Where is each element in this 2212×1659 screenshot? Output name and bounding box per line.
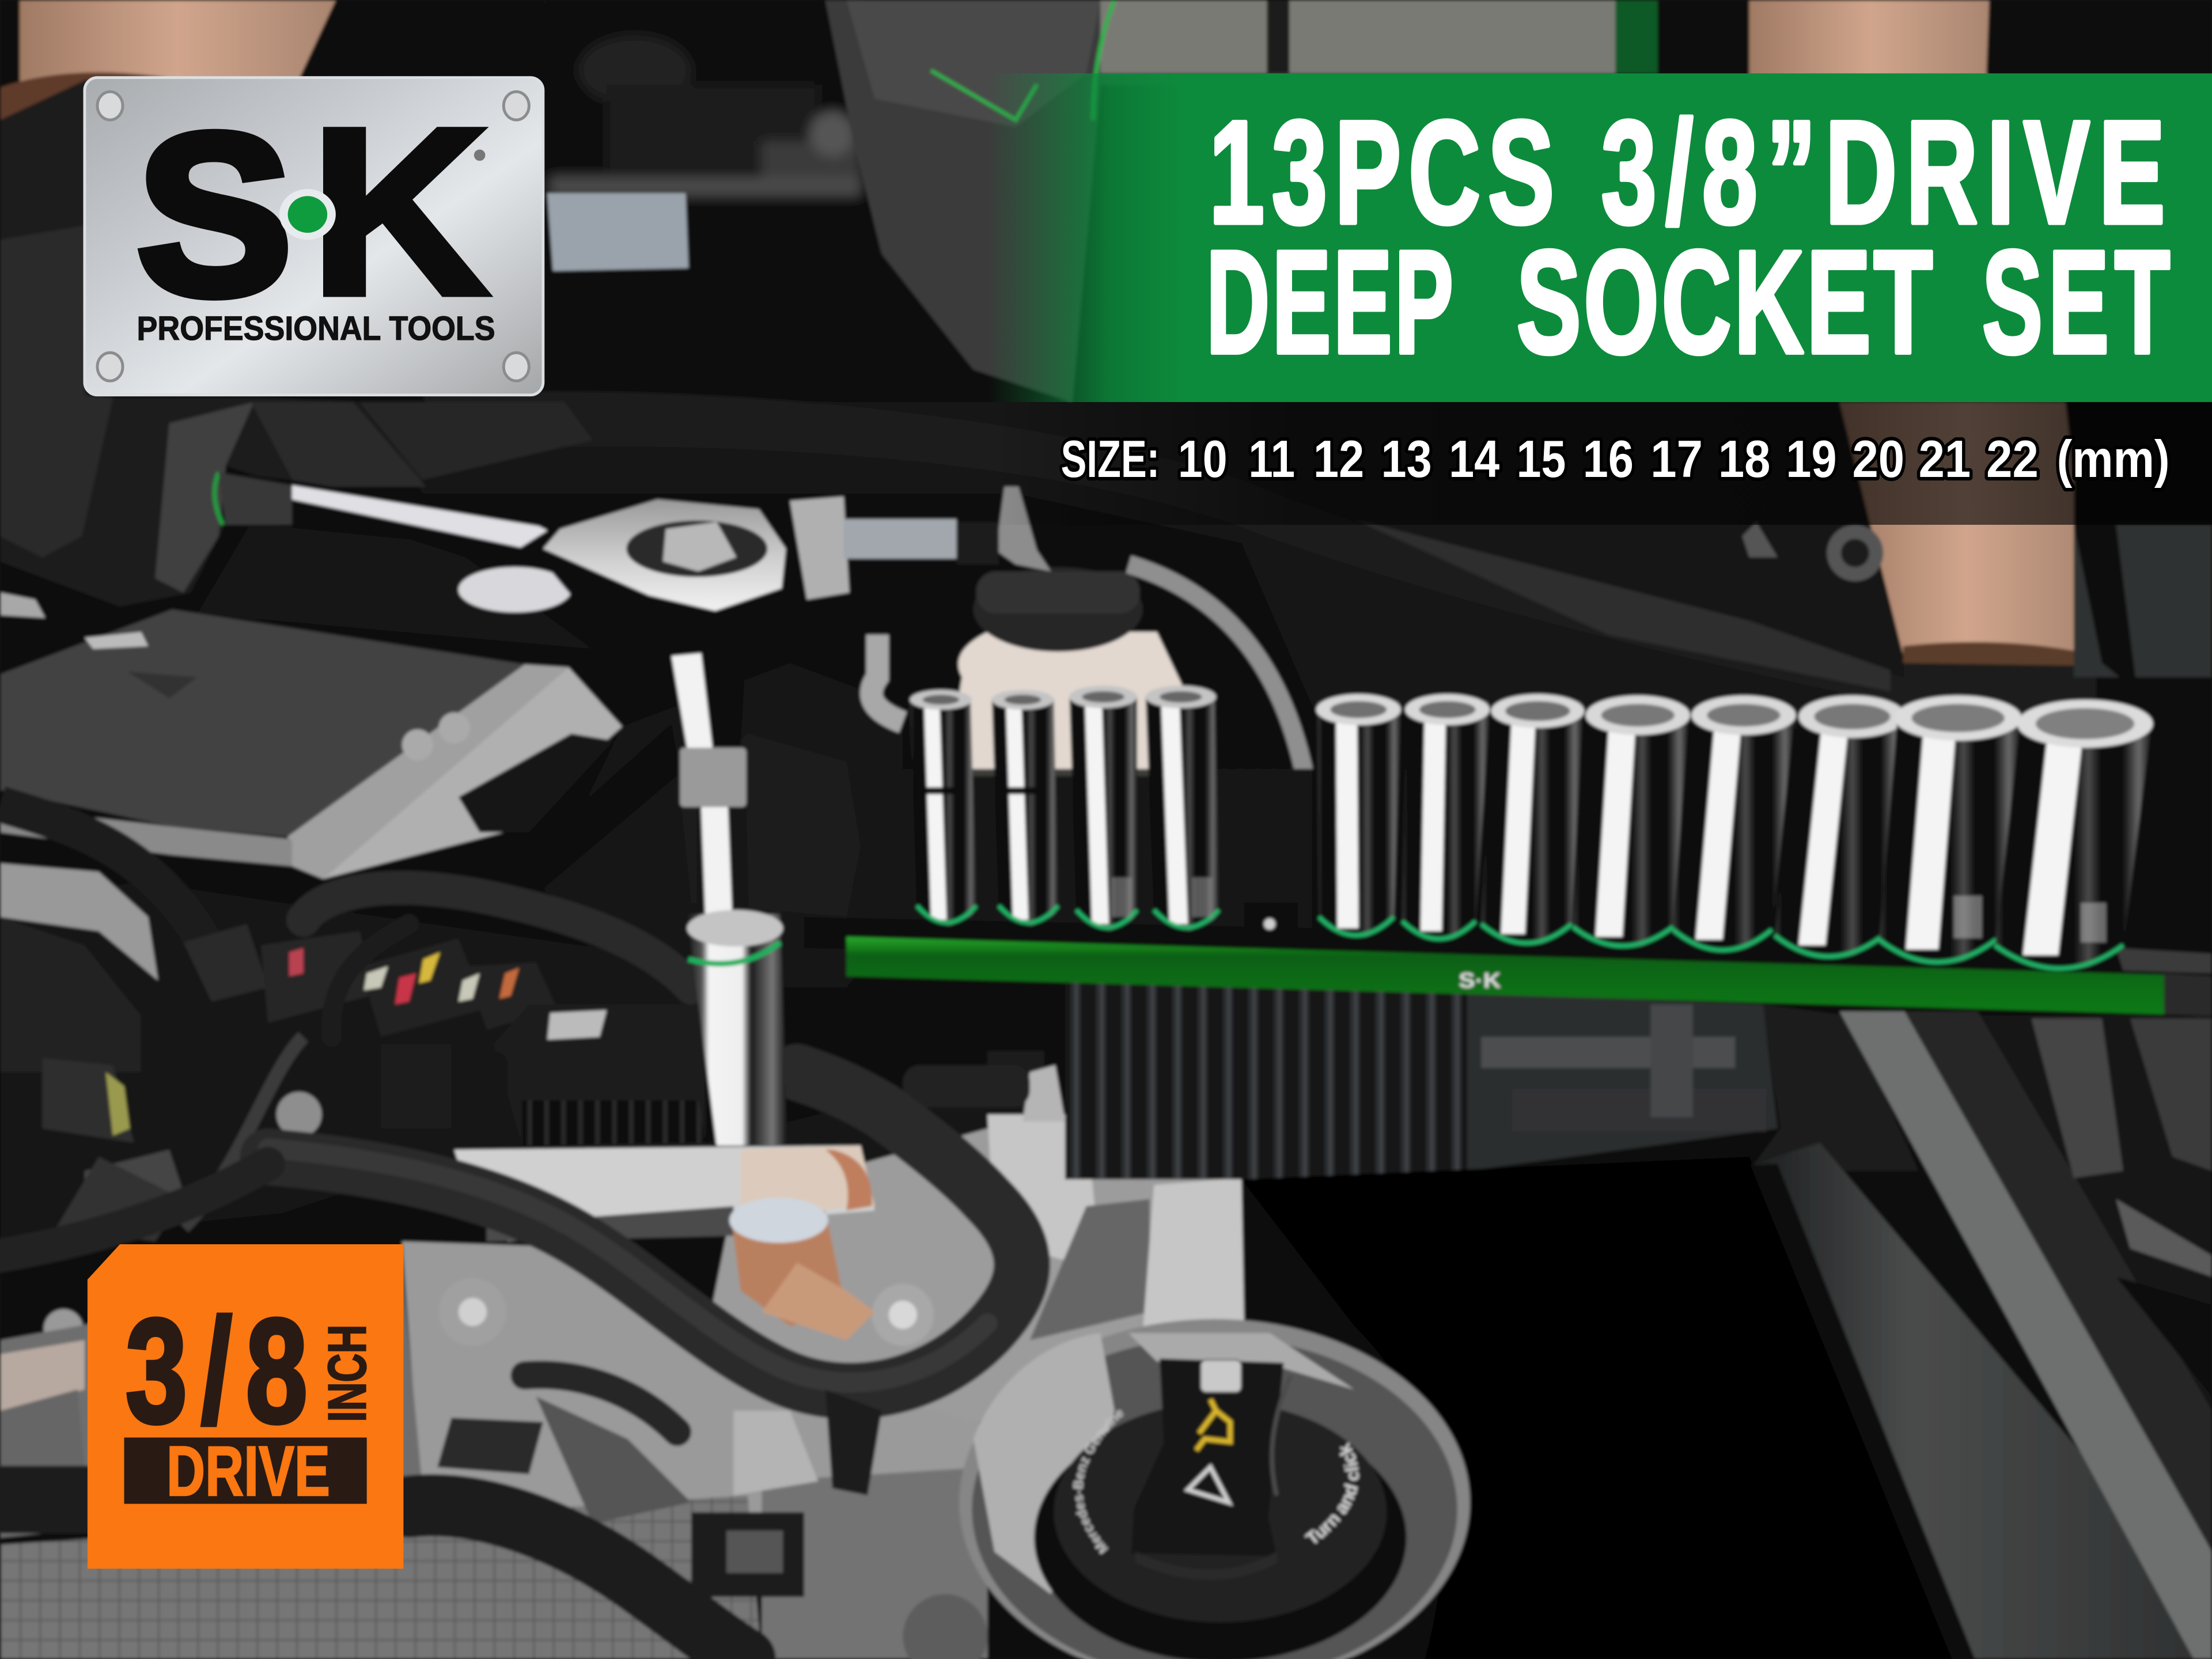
empty peg [1244,903,1298,945]
size list: 19 [1786,430,1837,488]
socket 15 [1402,694,1490,942]
logo letter K: K [310,79,488,344]
title line 1: 13PCS [1209,91,1554,255]
icon: warning triangle [1188,1467,1229,1502]
badge: INCH: INCH [317,1325,377,1422]
logo letter S: S [137,87,292,342]
title line 1 [1209,91,2165,255]
logo tagline: PROFESSIONAL TOOLS [137,310,495,347]
orange 3/8 inch drive badge [88,1244,403,1569]
size list: 12 [1313,430,1364,488]
size list: SIZE: [1061,430,1160,488]
title line 1: 3/8”DRIVE [1601,91,2165,255]
size list: 22 [1986,430,2039,488]
socket 22 [1995,700,2153,971]
socket 10 [910,690,976,926]
blurred engine bay, top centre [543,0,868,409]
left arm and glove [20,0,336,85]
extension bar [662,645,747,748]
rail brand mark: S·K [1459,968,1501,992]
size list: 17 [1650,430,1703,488]
connector boxes [261,931,374,1023]
size list: 11 [1248,430,1295,488]
badge: drive bar: DRIVE [166,1431,330,1510]
ratchet drive mechanism [626,521,767,577]
size list: 15 [1517,430,1566,488]
size list: (mm) [2057,430,2170,488]
hood and dark bay [353,402,1903,733]
lower left engine [0,1270,423,1537]
size list: 16 [1583,430,1634,488]
socket rail [804,917,2212,1016]
ratchet handle [230,472,635,646]
size list [1061,430,2170,488]
ratchet and extension [219,472,790,1146]
title line 2: SOCKET [1517,220,1933,384]
green title banner [987,73,2212,402]
size list: 14 [1449,430,1499,488]
socket 12 [1069,685,1137,931]
socket 14 [1316,694,1401,938]
ECU cover [0,609,622,879]
wrapped wiring loom [0,888,1022,1659]
ratchet head lower shadow [570,571,790,647]
dark size strip [987,402,2212,525]
socket 13 [1146,685,1219,931]
right arm [1749,0,1992,85]
size list: 20 [1853,430,1904,488]
reservoir tank [945,632,1185,776]
socket 19 [1775,695,1906,959]
size list: 13 [1381,430,1432,488]
title line 2 [1206,219,2170,384]
cap text: Turn and click: Turn and click [1302,1440,1362,1546]
mechanic shirt [825,0,1615,402]
registered mark [474,150,485,161]
size list: 21 [1919,430,1971,488]
socket 21 [1879,695,2021,965]
harness area [0,882,1072,1241]
licence plate [547,194,688,271]
cap text: Mercedes-Benz: Mercedes-Benz Genuine Motor Oil [1070,1408,1126,1556]
silver pipes [872,635,903,722]
extension socket [687,914,787,1146]
icon: fill-level marker [1200,1360,1241,1392]
title line 2: SET [1982,219,2170,384]
size list: 10 [1178,430,1228,488]
logo green dot [279,189,336,240]
socket 18 [1673,695,1796,953]
icon: oil can [1196,1399,1230,1450]
metal tube and copper elbow [454,1146,874,1340]
dark void lower centre [1241,1157,1954,1659]
plate screws [97,92,529,381]
ratchet head [543,499,786,611]
dark bay behind the rail [543,663,903,987]
oil filler funnel and cap [959,1317,1474,1659]
size list: 18 [1718,430,1770,488]
title line 2: DEEP [1206,220,1453,384]
twelve chrome deep sockets on rail [910,685,2153,971]
socket 17 [1573,695,1690,949]
sensor block [494,1005,705,1146]
engine silver block [705,1128,1241,1425]
ridged black cover [1216,769,1317,945]
badge: 3/8: 3/8 [126,1289,308,1454]
right-hand belt and panels [1751,1143,2212,1659]
S-K logo plate [85,78,543,395]
socket 11 [992,690,1058,926]
left sensors and hoses [42,1058,134,1143]
corrugated air duct [1065,982,1467,1179]
socket 16 [1481,694,1584,946]
